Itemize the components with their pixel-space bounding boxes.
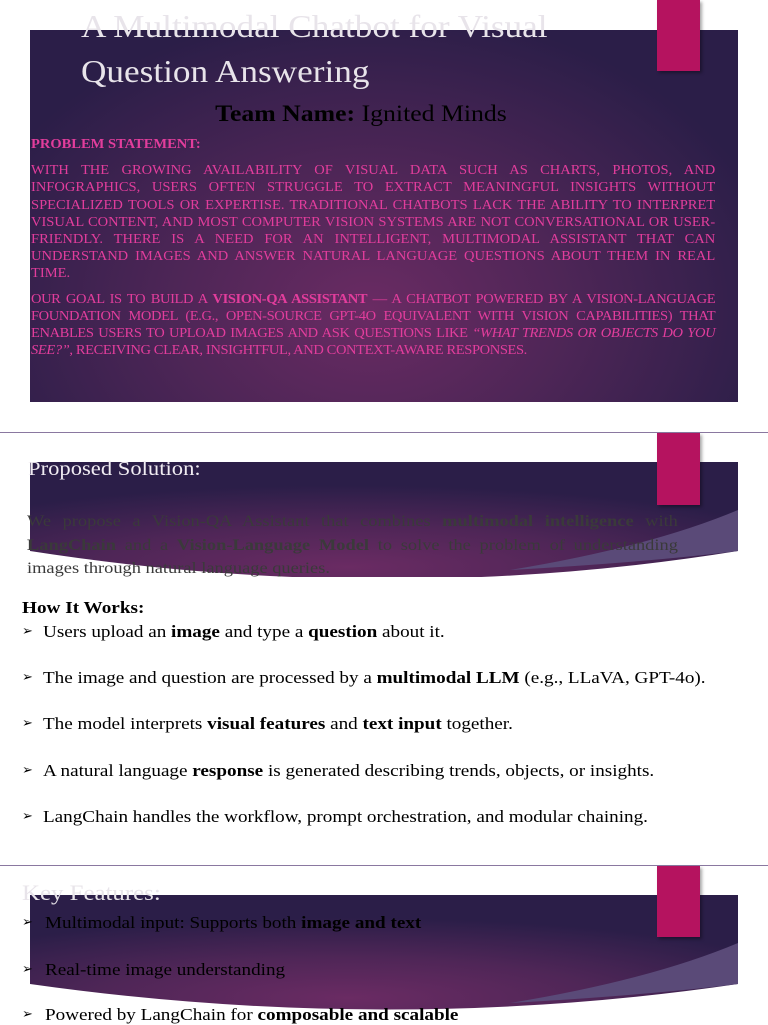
list: key features: Multimodal input: Supports both image and text bbox=[45, 913, 421, 932]
list: key features: Real-time image understanding bbox=[45, 960, 285, 979]
panel: proposed solution banner bbox=[30, 462, 738, 577]
list: how it works: Users upload an image and type a question about it. bbox=[43, 622, 445, 641]
divider 2 bbox=[0, 865, 768, 866]
list: how it works: ➢ bbox=[22, 623, 33, 638]
team name: Team Name: Ignited Minds bbox=[215, 101, 507, 126]
heading: how it works: How It Works: bbox=[22, 598, 144, 617]
list: key features: ➢ bbox=[22, 961, 33, 976]
accent bar 1 bbox=[657, 0, 700, 71]
list: how it works: The model interprets visual features and text input together. bbox=[43, 714, 513, 733]
list: how it works bbox=[22, 622, 706, 826]
list: how it works: ➢ bbox=[22, 669, 33, 684]
heading: proposed solution: Proposed Solution: bbox=[28, 458, 201, 480]
list: how it works: The image and question are processed by a multimodal LLM (e.g., LLaVA, GPT-4o). bbox=[43, 668, 706, 687]
list: key features: ➢ bbox=[22, 914, 33, 929]
list: key features: ➢ bbox=[22, 1006, 33, 1021]
list: how it works: LangChain handles the workflow, prompt orchestration, and modular chaining. bbox=[43, 807, 648, 826]
title bbox=[81, 8, 548, 89]
heading: key features: Key Features: bbox=[22, 880, 161, 905]
panel: key features banner bbox=[30, 895, 738, 1010]
list: how it works: A natural language response is generated describing trends, objects, or insights. bbox=[43, 761, 654, 780]
text: solution description: We propose a Vision-QA Assistant that combines multimodal intelligence with LangChain and a Vision-Language Model to solve the problem of understanding images through natural language queries. bbox=[27, 511, 678, 577]
title: A Multimodal Chatbot for Visual bbox=[81, 8, 548, 44]
problem statement bbox=[31, 136, 716, 357]
problem statement: WITH THE GROWING AVAILABILITY OF VISUAL DATA SUCH AS CHARTS, PHOTOS, AND INFOGRAPHICS, USERS OFTEN STRUGGLE TO EXTRACT MEANINGFUL INSIGHTS WITHOUT SPECIALIZED TOOLS OR EXPERTISE. TRADITIONAL CHATBOTS LACK THE ABILITY TO INTERPRET VISUAL CONTENT, AND MOST COMPUTER VISION SYSTEMS ARE NOT CONVERSATIONAL OR USER-FRIENDLY. THERE IS A NEED FOR AN INTELLIGENT, MULTIMODAL ASSISTANT THAT CAN UNDERSTAND IMAGES AND ANSWER NATURAL LANGUAGE QUESTIONS ABOUT THEM IN REAL TIME. bbox=[31, 162, 715, 280]
problem statement: PROBLEM STATEMENT: bbox=[31, 136, 201, 151]
list: how it works: ➢ bbox=[22, 808, 33, 823]
problem statement: OUR GOAL IS TO BUILD A VISION-QA ASSISTANT — A CHATBOT POWERED BY A VISION-LANGUAGE FOUNDATION MODEL (E.G., OPEN-SOURCE GPT-4O EQUIVALENT WITH VISION CAPABILITIES) THAT ENABLES USERS TO UPLOAD IMAGES AND ASK QUESTIONS LIKE “WHAT TRENDS OR OBJECTS DO YOU SEE?”, RECEIVING CLEAR, INSIGHTFUL, AND CONTEXT-AWARE RESPONSES. bbox=[31, 291, 715, 357]
title: Question Answering bbox=[81, 53, 369, 89]
divider 1 bbox=[0, 432, 768, 433]
list: key features bbox=[22, 913, 458, 1024]
list: how it works: ➢ bbox=[22, 762, 33, 777]
list: key features: Powered by LangChain for composable and scalable bbox=[45, 1005, 458, 1024]
list: how it works: ➢ bbox=[22, 715, 33, 730]
accent bar 2 bbox=[657, 433, 700, 505]
panel: title slide bbox=[30, 30, 738, 402]
accent bar 3 bbox=[657, 866, 700, 937]
